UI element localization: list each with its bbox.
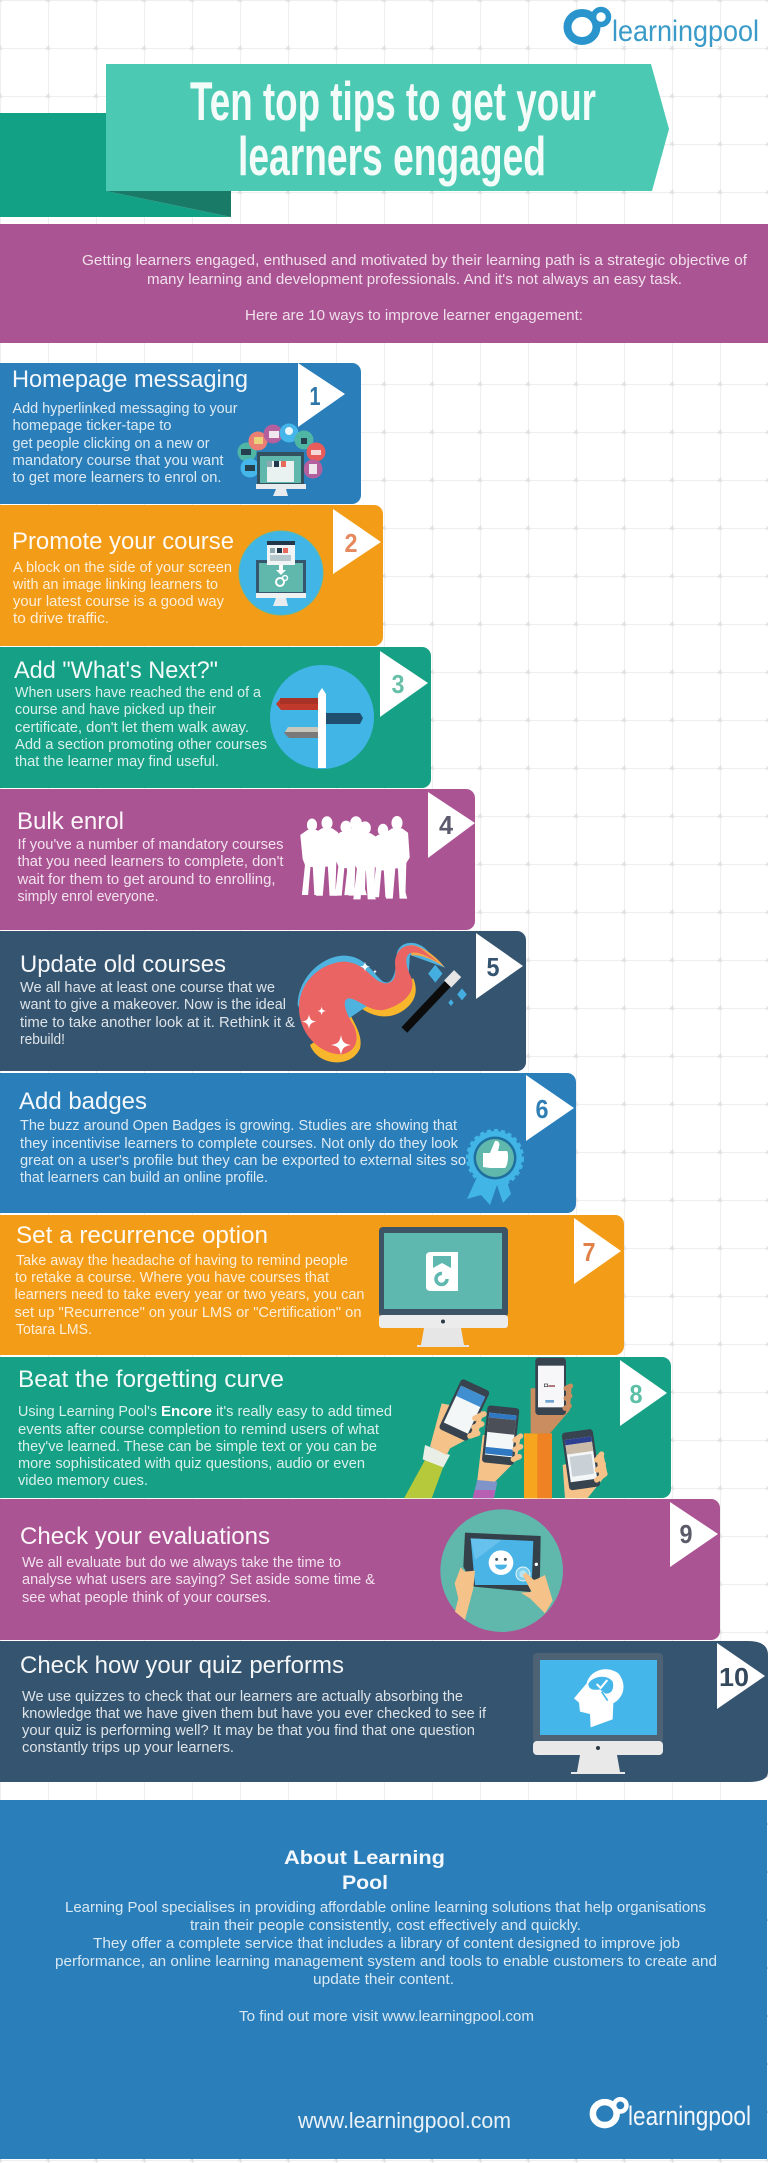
logo: learningpool top bbox=[568, 10, 759, 48]
body 8 bbox=[18, 1404, 392, 1489]
about heading: About Learning bbox=[284, 1847, 445, 1869]
body 1: to get more learners to enrol on. bbox=[12, 470, 222, 486]
body 3 bbox=[15, 685, 267, 770]
body 8: events after course completion to remind users of what bbox=[18, 1422, 379, 1438]
body 10: your quiz is performing well? It may be that you find that one question bbox=[22, 1723, 475, 1739]
body 1: get people clicking on a new or bbox=[12, 436, 210, 452]
heading 4: Bulk enrol bbox=[17, 808, 124, 835]
body 8: more sophisticated with quiz questions, audio or even bbox=[18, 1456, 365, 1472]
heading 7: Set a recurrence option bbox=[16, 1222, 268, 1249]
body 5 bbox=[19, 980, 295, 1048]
body 6: The buzz around Open Badges is growing. Studies are showing that bbox=[20, 1118, 457, 1134]
about text: To find out more visit www.learningpool.com bbox=[239, 2009, 534, 2025]
about text bbox=[55, 1900, 717, 2025]
body 8: video memory cues. bbox=[18, 1473, 148, 1489]
body 2: your latest course is a good way bbox=[13, 594, 225, 610]
panel: tip 9 check your evaluations bbox=[0, 1499, 720, 1640]
arrow with number 8 bbox=[620, 1360, 667, 1426]
body 7: learners need to take every year or two years, you can bbox=[14, 1287, 365, 1303]
body 10: knowledge that we have given them but have you ever checked to see if bbox=[22, 1706, 486, 1722]
heading 6: Add badges bbox=[19, 1088, 147, 1115]
body 9: see what people think of your courses. bbox=[22, 1590, 271, 1606]
body 9 bbox=[22, 1555, 375, 1606]
icon: monitor with head and brain bbox=[533, 1653, 663, 1774]
body 1: mandatory course that you want bbox=[12, 453, 224, 469]
body 7: Take away the headache of having to remind people bbox=[16, 1253, 348, 1269]
about text: They offer a complete service that includes a library of content designed to improve job bbox=[93, 1936, 680, 1952]
icon: tablet in circle bbox=[440, 1509, 563, 1632]
arrow with number 7 bbox=[574, 1218, 621, 1284]
icon: monitor with book bbox=[379, 1227, 508, 1347]
heading 5: Update old courses bbox=[20, 951, 226, 978]
logo: learningpool white bbox=[593, 2099, 751, 2131]
body 3: that the learner may find useful. bbox=[15, 754, 219, 770]
arrow with number 5 bbox=[476, 933, 523, 999]
heading 3: Add "What's Next?" bbox=[14, 657, 218, 684]
body 4: that you need learners to complete, don't bbox=[18, 854, 284, 870]
arrow with number 3: 3 bbox=[392, 669, 404, 699]
heading 2: Promote your course bbox=[12, 528, 234, 555]
arrow with number 6: 6 bbox=[536, 1094, 548, 1124]
body 5: time to take another look at it. Rethink it & bbox=[20, 1015, 295, 1031]
panel: tip 5 update old courses bbox=[0, 931, 526, 1071]
title banner bbox=[0, 64, 669, 217]
body 3: certificate, don't let them walk away. bbox=[15, 720, 249, 736]
panel: tip 3 what's next bbox=[0, 647, 431, 788]
heading 1: Homepage messaging bbox=[12, 366, 248, 393]
body 9: analyse what users are saying? Set aside some time & bbox=[22, 1572, 375, 1588]
body 2: to drive traffic. bbox=[13, 611, 109, 627]
website link: www.learningpool.com bbox=[297, 2108, 511, 2133]
body 9: We all evaluate but do we always take the time to bbox=[22, 1555, 341, 1571]
body 1 bbox=[12, 401, 238, 486]
body 7: Totara LMS. bbox=[16, 1322, 92, 1338]
intro text: Getting learners engaged, enthused and motivated by their learning path is a strategic objective of bbox=[82, 253, 748, 269]
about heading: Pool bbox=[342, 1872, 388, 1894]
arrow with number 4: 4 bbox=[439, 810, 454, 840]
arrow with number 1 bbox=[298, 363, 345, 427]
panel: tip 4 bulk enrol bbox=[0, 789, 475, 930]
icon: rosette badge with thumbs up bbox=[467, 1131, 522, 1205]
body 8: it's really easy to add timed bbox=[216, 1404, 392, 1420]
icon: signpost bbox=[270, 665, 374, 769]
intro text: Here are 10 ways to improve learner engagement: bbox=[245, 308, 583, 324]
body 8: Encore bbox=[161, 1404, 212, 1420]
body 7: set up "Recurrence" on your LMS or "Certification" on bbox=[14, 1305, 362, 1321]
about text: performance, an online learning management system and tools to enable customers to create and bbox=[55, 1954, 717, 1970]
icon: monitor with app bubbles bbox=[238, 424, 326, 496]
body 6: that learners can build an online profile. bbox=[20, 1170, 268, 1186]
intro text bbox=[82, 253, 748, 324]
arrow with number 7: 7 bbox=[582, 1237, 596, 1267]
body 6 bbox=[20, 1118, 466, 1186]
intro text: many learning and development professionals. And it's not always an easy task. bbox=[147, 272, 682, 288]
body 8: Using Learning Pool's bbox=[18, 1404, 157, 1420]
about heading bbox=[284, 1847, 445, 1894]
panel: about learning pool bbox=[0, 1800, 767, 2159]
arrow with number 6 bbox=[526, 1075, 574, 1141]
arrow with number 2 bbox=[333, 509, 381, 574]
icon: group silhouette bbox=[300, 816, 410, 899]
body 10: We use quizzes to check that our learners are actually absorbing the bbox=[22, 1689, 463, 1705]
body 10 bbox=[22, 1689, 486, 1756]
arrow with number 1: 1 bbox=[310, 381, 320, 411]
body 2 bbox=[12, 560, 232, 627]
title text: learners engaged bbox=[238, 125, 546, 187]
body 10: constantly trips up your learners. bbox=[22, 1740, 234, 1756]
body 5: rebuild! bbox=[20, 1032, 65, 1048]
arrow with number 4 bbox=[428, 792, 475, 858]
panel: tip 8 beat the forgetting curve bbox=[0, 1357, 671, 1499]
about text: update their content. bbox=[313, 1972, 454, 1988]
heading 9: Check your evaluations bbox=[20, 1523, 270, 1550]
body 2: with an image linking learners to bbox=[12, 577, 218, 593]
body 6: great on a user's profile but they can be exported to external sites so bbox=[20, 1153, 466, 1169]
about text: train their people consistently, cost effectively and quickly. bbox=[190, 1918, 581, 1934]
heading 8: Beat the forgetting curve bbox=[18, 1366, 284, 1393]
panel: tip 10 check how your quiz performs bbox=[0, 1641, 768, 1782]
panel: tip 1 homepage messaging bbox=[0, 363, 361, 504]
body 3: When users have reached the end of a bbox=[15, 685, 261, 701]
body 8: they've learned. These can be simple text or you can be bbox=[18, 1439, 377, 1455]
body 4: simply enrol everyone. bbox=[18, 889, 158, 905]
icon: monitor in circle bbox=[239, 531, 323, 615]
body 4 bbox=[16, 837, 284, 905]
body 6: they incentivise learners to complete courses. Not only do they look bbox=[20, 1136, 459, 1152]
title text bbox=[190, 70, 596, 187]
icon: hands holding phones bbox=[404, 1358, 607, 1499]
panel: tip 7 set a recurrence option bbox=[0, 1215, 624, 1355]
body 7 bbox=[14, 1253, 365, 1338]
body 3: Add a section promoting other courses bbox=[15, 737, 267, 753]
body 3: course and have picked up their bbox=[15, 702, 216, 718]
arrow with number 2: 2 bbox=[344, 528, 358, 558]
arrow with number 10: 10 bbox=[719, 1662, 749, 1692]
arrow with number 5: 5 bbox=[486, 952, 500, 982]
body 7: to retake a course. Where you have courses that bbox=[15, 1270, 329, 1286]
arrow with number 10 bbox=[717, 1643, 765, 1709]
body 1: homepage ticker-tape to bbox=[12, 418, 172, 434]
body 5: We all have at least one course that we bbox=[20, 980, 275, 996]
body 4: If you've a number of mandatory courses bbox=[18, 837, 284, 853]
arrow with number 9 bbox=[670, 1502, 718, 1567]
panel: tip 6 add badges bbox=[0, 1073, 576, 1213]
body 4: wait for them to get around to enrolling, bbox=[16, 872, 276, 888]
icon: magic wand and swirl bbox=[298, 943, 467, 1062]
panel: tip 2 promote your course bbox=[0, 505, 383, 646]
panel: intro bbox=[0, 224, 768, 343]
heading 10: Check how your quiz performs bbox=[20, 1652, 344, 1679]
arrow with number 8: 8 bbox=[630, 1379, 642, 1409]
arrow with number 9: 9 bbox=[680, 1519, 692, 1549]
body 2: A block on the side of your screen bbox=[13, 560, 232, 576]
body 1: Add hyperlinked messaging to your bbox=[12, 401, 238, 417]
arrow with number 3 bbox=[380, 651, 428, 717]
body 5: want to give a makeover. Now is the ideal bbox=[19, 997, 286, 1013]
about text: Learning Pool specialises in providing affordable online learning solutions that help organisations bbox=[65, 1900, 706, 1916]
